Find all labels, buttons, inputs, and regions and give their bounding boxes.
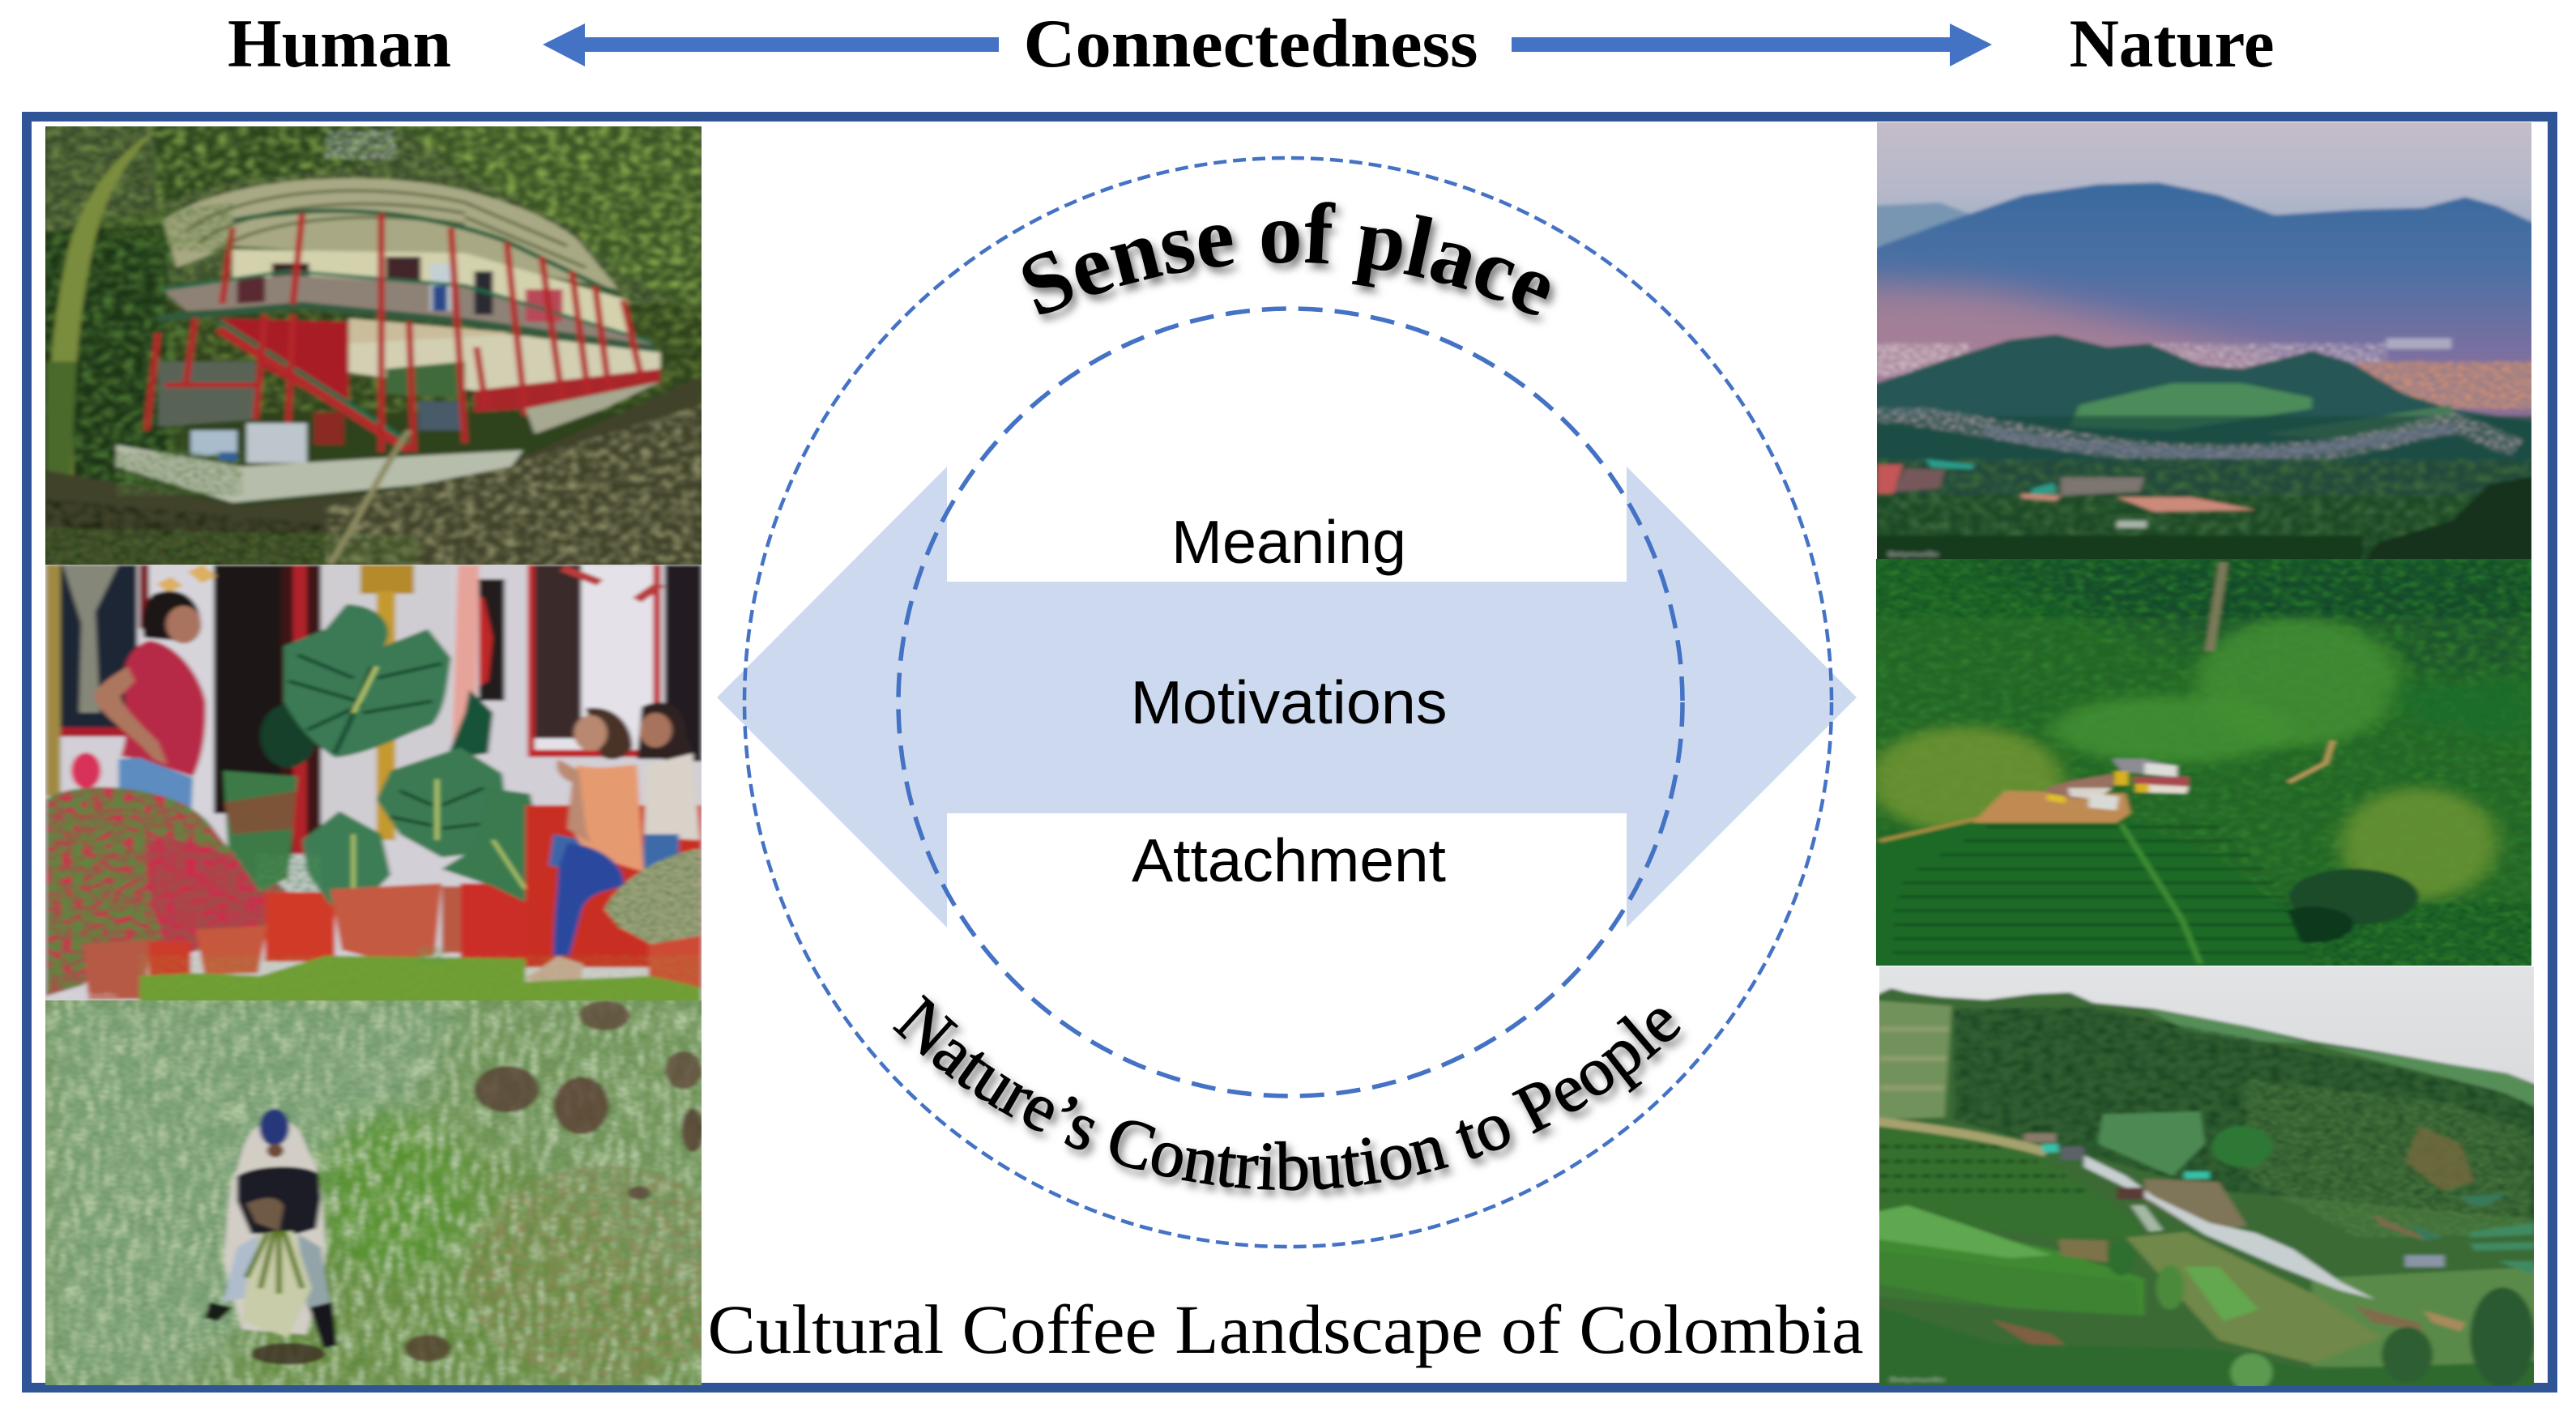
inner dashed circle xyxy=(898,309,1683,1096)
photo: terraced hillside with greenhouses: Betymurillo xyxy=(1890,1376,1945,1384)
label: Motivations: Motivations xyxy=(1131,668,1447,736)
figure: monstera plants xyxy=(224,604,546,962)
curved heading: Nature's Contribution to People: Nature’s Contribution to People xyxy=(893,995,1688,1202)
figure: flowering bush xyxy=(45,753,290,996)
photo: women chatting on a porch with plants: Bety Murillo xyxy=(58,992,117,1000)
curved heading: Sense of place: Sense of place xyxy=(1021,202,1559,326)
outer dashed circle xyxy=(744,158,1832,1247)
photo: farmer harvesting green onions xyxy=(45,1000,702,1385)
figure: greenhouse strip xyxy=(2024,1133,2445,1299)
photo: coffee plantation valley with farmhouse xyxy=(1866,553,2544,972)
figure: farmhouse xyxy=(1973,759,2189,823)
arrow: connectedness toward human xyxy=(543,23,999,66)
label: Attachment: Attachment xyxy=(1132,826,1446,894)
heading: Nature: Nature xyxy=(2069,6,2275,82)
photo: mountain and city at dusk xyxy=(1877,122,2531,559)
figure: seated women xyxy=(526,702,702,986)
photo: red and green coffee hacienda among trees xyxy=(37,119,711,575)
label: Meaning: Meaning xyxy=(1171,508,1406,576)
photo: women chatting on a porch with plants xyxy=(37,560,711,1008)
figure: standing woman in red shirt xyxy=(94,591,206,834)
photo: terraced hillside with greenhouses xyxy=(1866,962,2544,1396)
photo: mountain and city at dusk: Betymurillo xyxy=(1888,551,1938,559)
big double-headed arrow: motivations xyxy=(717,467,1857,928)
heading: Connectedness: Connectedness xyxy=(1024,6,1478,82)
caption: Cultural Coffee Landscape of Colombia: Cultural Coffee Landscape of Colombia xyxy=(708,1290,1863,1368)
arrow: connectedness toward nature xyxy=(1512,23,1992,66)
figure: farmer xyxy=(205,1109,337,1348)
heading: Human: Human xyxy=(228,6,451,82)
figure: right pot and plant xyxy=(604,849,702,989)
